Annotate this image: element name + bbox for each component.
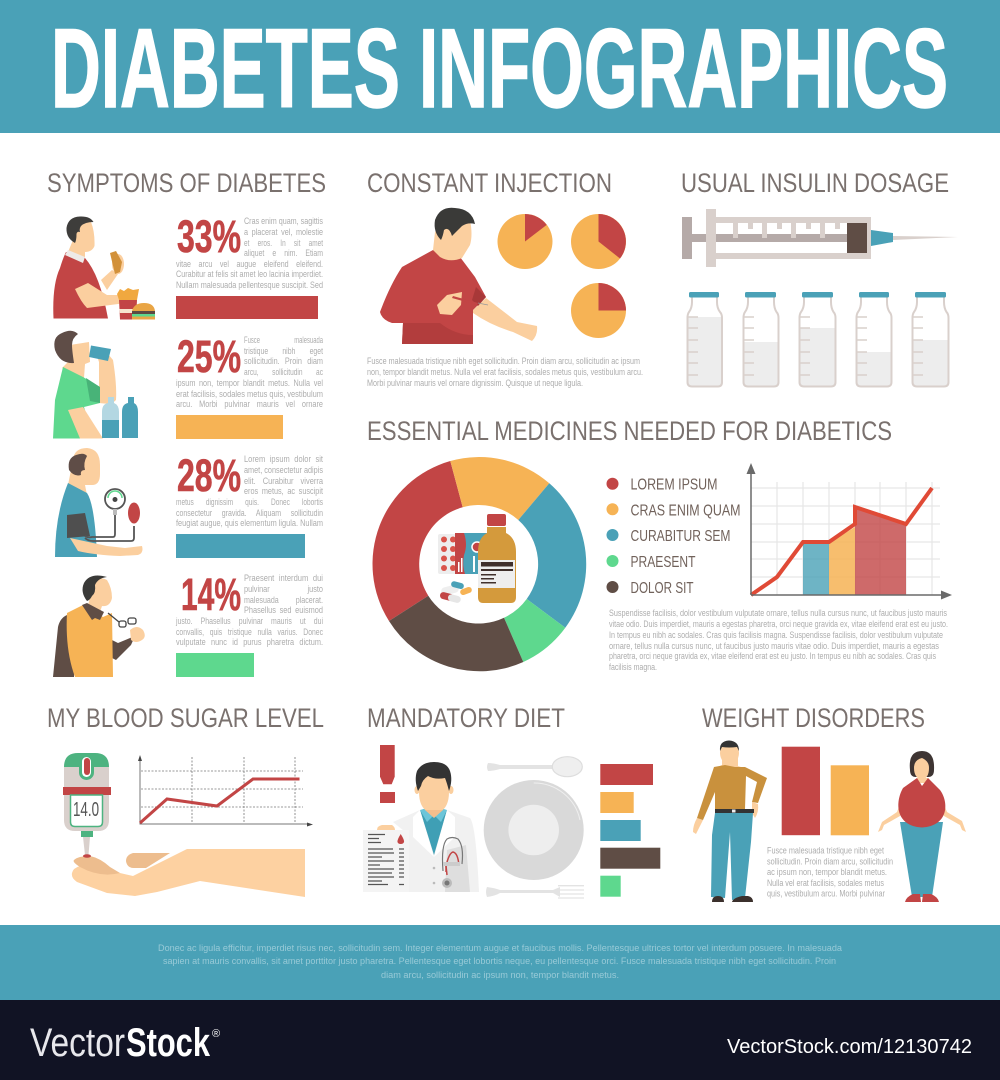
icon: doctor [363,762,479,892]
legend: LOREM IPSUM [630,476,718,494]
icon: exclamation mark [380,745,395,803]
line chart [138,755,313,826]
text block [176,454,323,528]
legend: PRAESENT [630,554,696,571]
text block: feugiat augue, quis elementum ligula. Nullam [176,518,323,528]
logo [30,1021,211,1065]
heading: symptoms of diabetes: SYMPTOMS OF DIABETES [47,168,326,198]
text block: Fusce malesuada tristique nibh eget sollicitudin. Proin diam arcu, sollicitudin ac ipsum [367,356,640,366]
panel: blood sugar [63,753,313,897]
bar [176,296,318,319]
logo: Vector [30,1021,125,1065]
footer band [0,925,1000,1000]
panel: symptom 14 percent [53,569,323,677]
text block: Praesent interdum dui [244,573,323,583]
text block: Morbi pulvinar mauris vel ornare dignissim. Quisque ut neque ligula. [367,378,583,388]
text block: Nulla vel erat facilisis, sodales metus [767,878,884,888]
text block [175,573,323,647]
text block: a placerat vel, molestie [244,227,323,237]
text block [176,335,323,409]
text block [767,846,893,898]
text block: Fusce malesuada tristique nibh eget [767,846,884,856]
watermark bar [0,1000,1000,1080]
text block: facilisis magna. [609,662,657,672]
panel: symptom 33 percent [53,211,323,320]
footer text: diam arcu, sollicitudin ac ipsum non, tempor blandit metus. [381,970,619,980]
logo: Stock [126,1021,211,1065]
bar chart [782,747,869,835]
icon: man drinking water [53,331,138,438]
text block: Nullam malesuada pellentesque suscipit. Sed [176,280,323,290]
icon: man holding glasses [53,575,145,677]
panel: essential medicines [373,457,952,672]
text block: sollicitudin. Proin diam [244,356,323,366]
text block: ipsum non, tempor blandit metus. Nulla vel [176,378,323,388]
text block: vulputate nunc id purus pharetra dictum. [176,637,323,647]
text block: quis, vestibulum arcu. Morbi pulvinar [767,888,885,898]
panel: symptom 28 percent [55,448,323,558]
text block: et eros. In sit amet [244,238,323,248]
pie chart 3 [571,283,626,338]
stat: 14%: 14% [181,569,241,620]
text block: Curabitur at felis sit amet leo lacinia imperdiet. [176,269,323,279]
donut chart [373,457,586,671]
heading: mandatory diet: MANDATORY DIET [367,703,565,733]
icon: spoon [487,757,582,777]
text block [609,608,948,672]
heading: my blood sugar level: MY BLOOD SUGAR LEVEL [47,703,324,733]
stat: 28%: 28% [177,450,241,501]
text block [176,216,323,290]
bar [176,653,254,677]
text block: metus dignissim quis. Donec lobortis [176,497,323,507]
heading: usual insulin dosage: USUAL INSULIN DOSAGE [681,168,949,198]
heading: constant injection: CONSTANT INJECTION [367,168,612,198]
icon: vial 4 [856,292,892,386]
icon: hand [72,849,305,897]
icon: fork [486,886,584,898]
text block: aliquet e nim. Etiam [244,248,323,258]
heading: weight disorders: WEIGHT DISORDERS [702,703,925,733]
pie chart 2 [571,214,626,269]
text block: Cras enim quam, sagittis [244,216,323,226]
text block: vitae arcu vel augue eleifend eleifend. [176,259,323,269]
panel: mandatory diet [363,745,660,898]
icon: overweight woman [878,751,966,902]
icon: man eating fast food [53,216,155,320]
text block: erat facilisis, sodales metus quis, vestibulum [176,389,323,399]
footer text: sapien at mauris convallis, sit amet porttitor justo pharetra. Pellentesque eget lobortis neque, eu pellentesque orci. Fusce malesuada tristique nibh eget sollicitudin. Proin [163,956,836,966]
text block: convallis, quis tristique nulla varius. Donec [176,627,323,637]
text block: amet, consectetur adipis [244,465,323,475]
legend: DOLOR SIT [630,580,694,597]
icon: man with blood pressure cuff [55,448,142,557]
panel: symptom 25 percent [53,331,323,439]
stat: 33%: 33% [177,211,241,262]
icon: vial 2 [744,292,778,386]
text block [367,356,643,388]
icon: glucose meter [63,753,111,858]
panel: insulin dosage [682,209,958,386]
bar [176,415,283,439]
text block: malesuada placerat. [244,595,323,605]
horizontal bars [600,764,660,897]
text block: ornare, tellus nulla cursus nunc, ut faucibus justo mauris vitae odio. Duis imperdiet, mauris a egestas [609,641,939,651]
text block: Phasellus sed euismod [244,605,323,615]
panel: weight disorders [693,740,966,902]
icon: medicines [438,514,516,604]
icon: vial 3 [800,292,836,386]
heading: essential medicines: ESSENTIAL MEDICINES NEEDED FOR DIABETICS [367,416,892,446]
icon: vial 1 [688,292,722,386]
panel: constant injection [367,208,643,388]
legend: CURABITUR SEM [630,528,730,545]
text block: arcu. Morbi pulvinar mauris vel ornare [176,399,323,409]
legend [606,476,740,597]
icon: man injecting insulin [380,208,537,344]
text block: tristique nibh eget [244,346,323,356]
icon: vial 5 [912,292,948,386]
icon: thin man [693,740,767,902]
text block: consectetur gravida. Aliquam sollicitudin [176,508,323,518]
text block: Lorem ipsum dolor sit [244,454,323,464]
stat: 25%: 25% [177,331,241,382]
footer text [158,943,842,980]
footer text: Donec ac ligula efficitur, imperdiet risus nec, sollicitudin sem. Integer elementum augue et faucibus mollis. Pellentesque ultrices tortor vel interdum posuere. In malesuada [158,943,842,953]
text block: non, tempor blandit metus. Nulla vel erat facilisis, sodales metus quis, vestibulum arcu. [367,367,643,377]
text block: arcu, sollicitudin ac [244,367,323,377]
legend: CRAS ENIM QUAM [630,502,740,519]
bar [176,534,305,558]
text block: Fusce malesuada [244,335,323,345]
registered mark: ® [212,1028,220,1040]
icon: plate [484,780,584,880]
pie chart 1 [498,214,552,269]
text block: elit. Curabitur viverra [244,476,323,486]
text block: pulvinar justo [244,584,323,594]
image id: VectorStock.com/12130742 [727,1036,972,1058]
meter reading: 14.0 [73,799,99,821]
icon: syringe [682,209,958,267]
header banner [0,0,1000,133]
text block: eros metus, ac suscipit [244,486,323,496]
line and area chart [746,463,952,600]
text block: justo. Phasellus pulvinar mauris ut dui [175,616,323,626]
text block: ac ipsum non, tempor blandit metus. [767,867,887,877]
text block: sollicitudin. Proin diam arcu, sollicitudin [767,856,893,866]
